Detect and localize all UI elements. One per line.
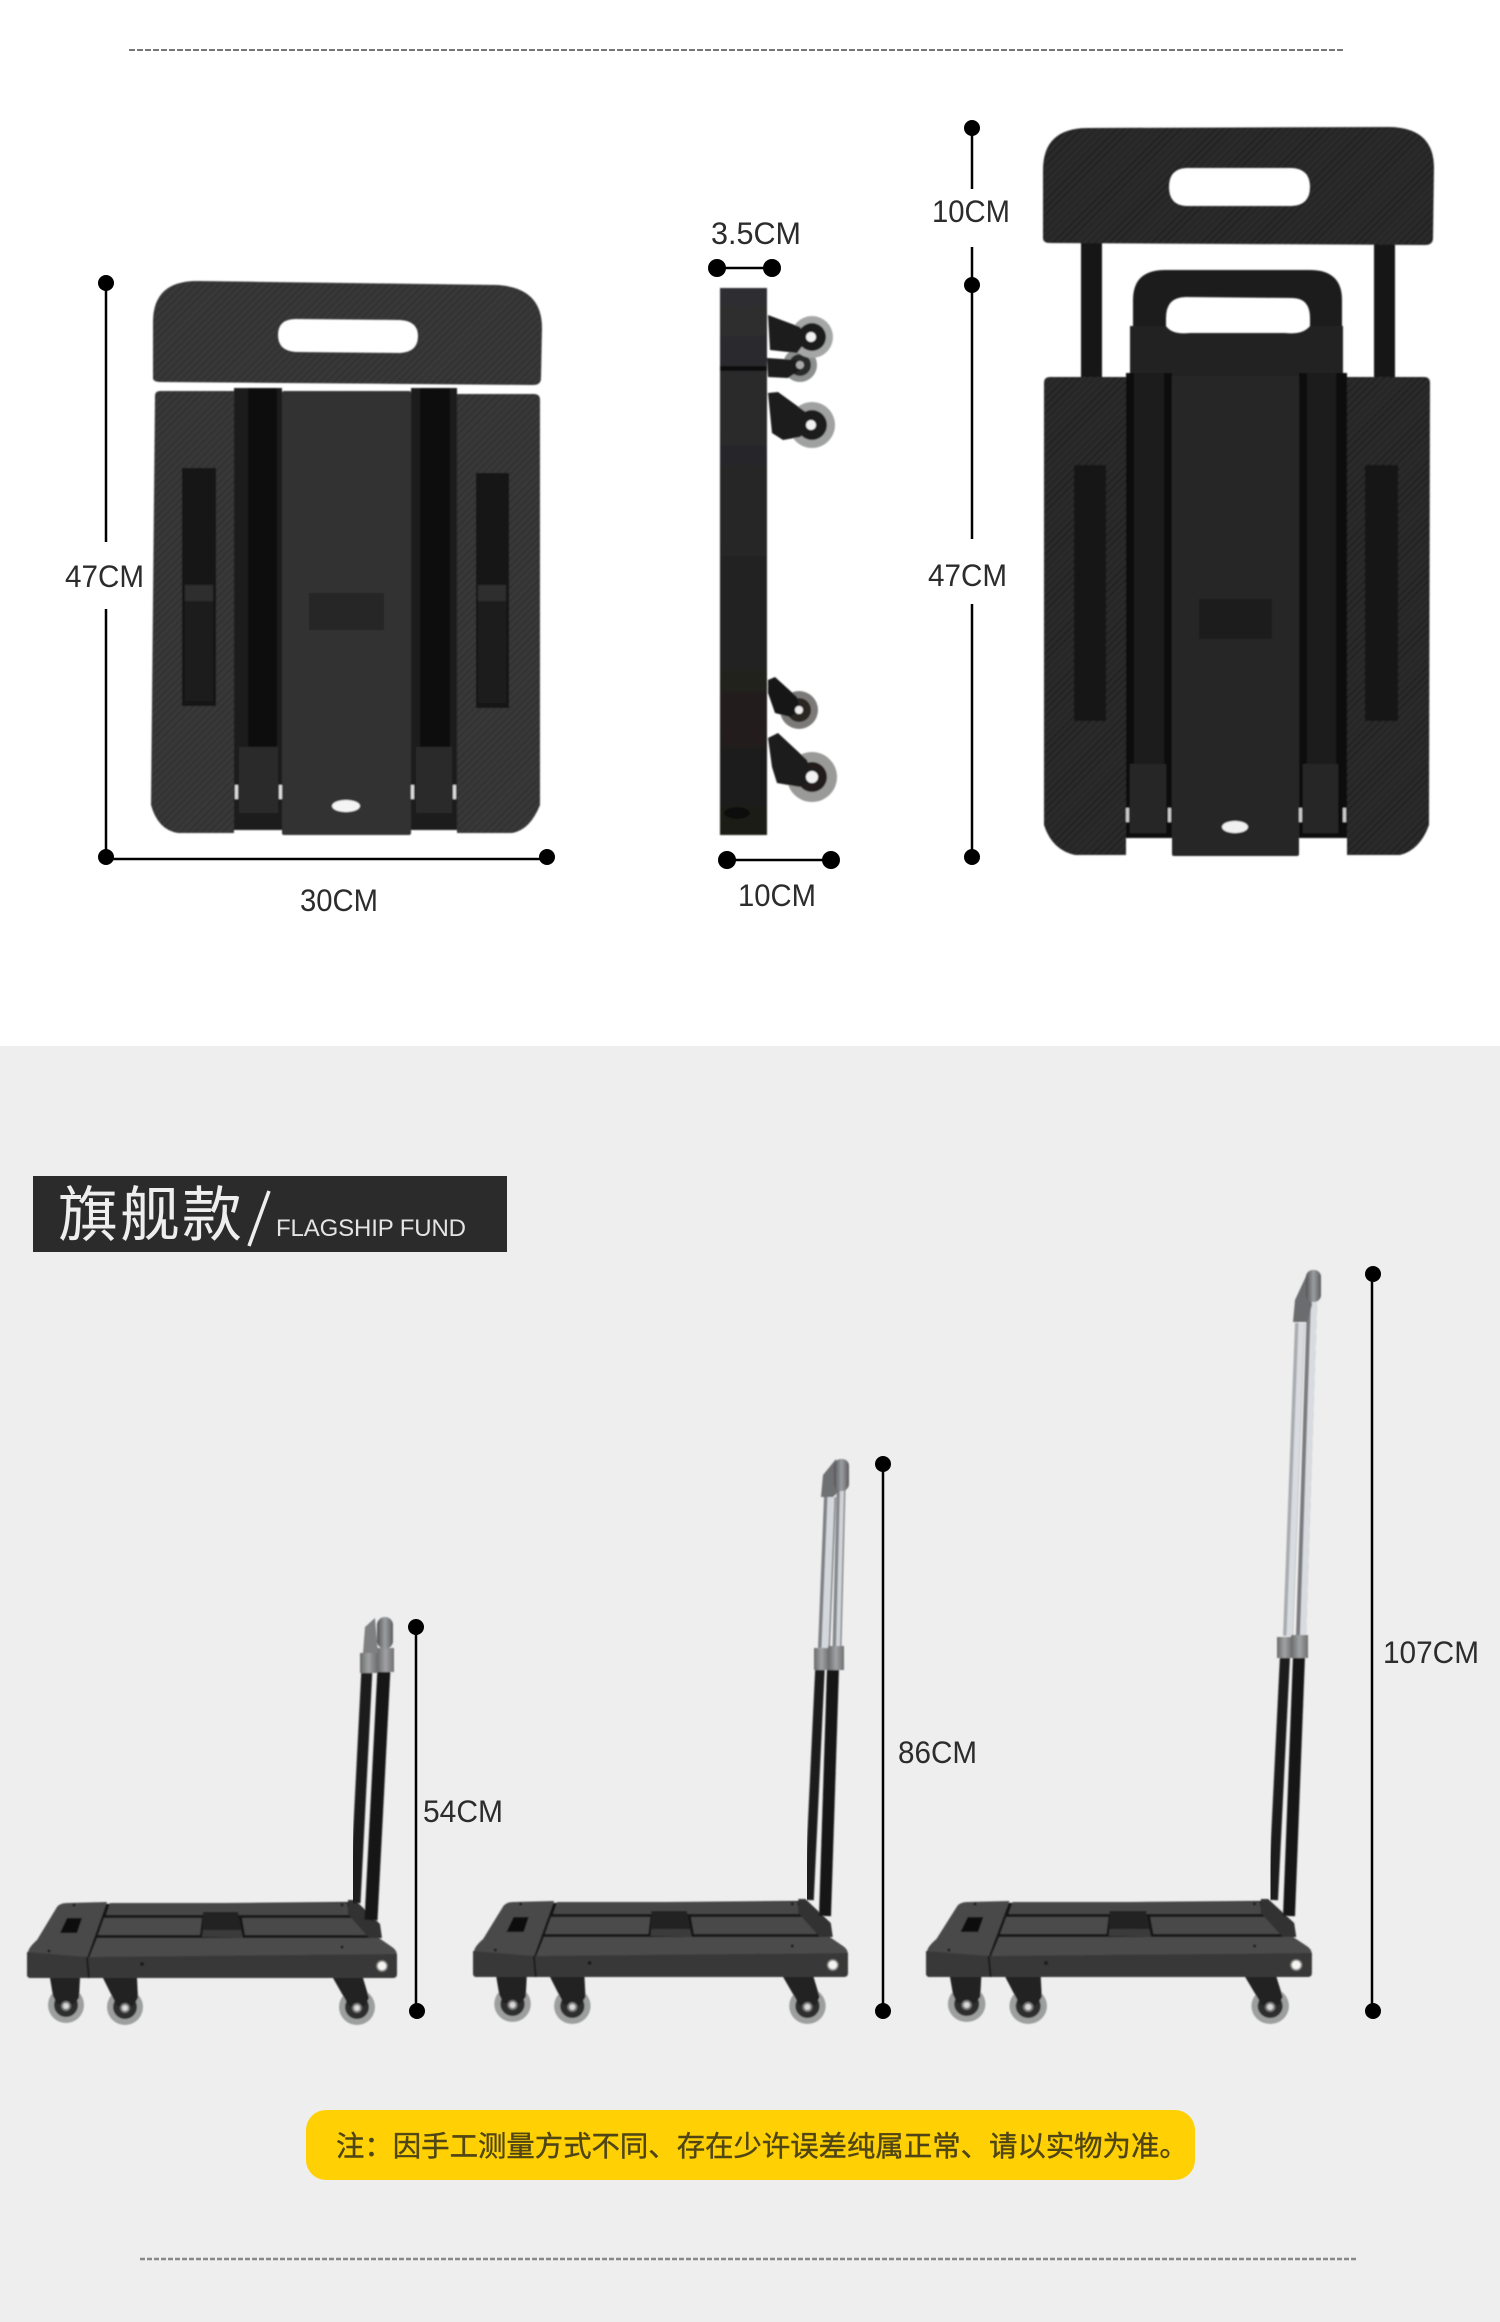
centre body panel: [1172, 376, 1299, 856]
heading: flagship: [33, 1176, 507, 1252]
top handle plate: [153, 281, 542, 385]
folded trolley illustration: [151, 281, 542, 835]
dimension 54CM: [408, 1619, 503, 2019]
dimension 86CM: 86CM: [898, 1734, 977, 1770]
right slot: [476, 473, 509, 708]
black channels: [1126, 373, 1172, 838]
heading: flagship: 旗舰款: [58, 1182, 242, 1249]
wheels, lower group: [768, 677, 837, 802]
side profile body: [720, 288, 767, 835]
wheels, upper group: [767, 315, 835, 448]
dimension 10CM and 47CM right: [928, 120, 1010, 865]
left body panel: [1044, 377, 1126, 855]
label recess: [1199, 599, 1272, 639]
panel: trolley at 86CM: [473, 1456, 977, 2024]
callout: measurement note: [306, 2110, 1195, 2180]
dimension 47CM left: 47CM: [65, 558, 144, 594]
telescoping U handle: [1130, 270, 1343, 378]
dimension 30CM: [106, 849, 555, 918]
dimension 10CM and 47CM right: 10CM: [932, 193, 1010, 229]
extended trolley illustration: [1043, 127, 1434, 856]
dimension 10CM and 47CM right: 47CM: [928, 557, 1007, 593]
right body panel: [457, 394, 540, 833]
dimension 10CM bottom: 10CM: [738, 877, 816, 913]
dimension 10CM bottom: [718, 851, 840, 913]
trolley base: [27, 1900, 397, 2025]
panel: trolley at 107CM: [926, 1266, 1479, 2024]
dimension 3.5CM: 3.5CM: [711, 215, 801, 251]
dimension 3.5CM: [708, 215, 801, 277]
dimension 107CM: 107CM: [1383, 1634, 1479, 1670]
trolley base: [926, 1899, 1312, 2024]
telescopic handle: [809, 1459, 849, 1916]
label recess: [309, 593, 384, 630]
oval hole: [332, 800, 360, 812]
telescopic handle: [1273, 1270, 1321, 1916]
telescopic handle: [355, 1617, 394, 1920]
right body panel: [1347, 377, 1430, 855]
side posts: [1081, 240, 1102, 380]
trolley base: [473, 1899, 848, 2024]
top handle plate: [1043, 127, 1434, 245]
panel: folded trolley front view: [65, 275, 555, 918]
right slot: [1365, 465, 1398, 721]
heading: flagship: FLAGSHIP FUND: [276, 1215, 466, 1242]
panel: trolley at 54CM: [27, 1617, 503, 2025]
side view trolley illustration: [720, 288, 837, 835]
black channels: [234, 388, 282, 830]
left slot: [1074, 465, 1106, 721]
left slot: [182, 468, 216, 706]
callout: measurement note: 注：因手工测量方式不同、存在少许误差纯属正常、请以实物为准。: [336, 2131, 1188, 2163]
left body panel: [151, 391, 234, 833]
dimension 54CM: 54CM: [423, 1793, 503, 1829]
panel: side view: [708, 215, 840, 913]
panel: extended handle front view: [928, 120, 1434, 865]
white top background: [0, 0, 1500, 1046]
dimension 47CM left: [65, 275, 144, 865]
dimension 86CM: [875, 1456, 977, 2019]
dimension 30CM: 30CM: [300, 882, 378, 918]
grey lower panel background: [0, 1046, 1500, 2322]
centre body panel: [282, 391, 411, 835]
dimension 107CM: [1365, 1266, 1479, 2019]
oval hole: [1222, 821, 1248, 833]
